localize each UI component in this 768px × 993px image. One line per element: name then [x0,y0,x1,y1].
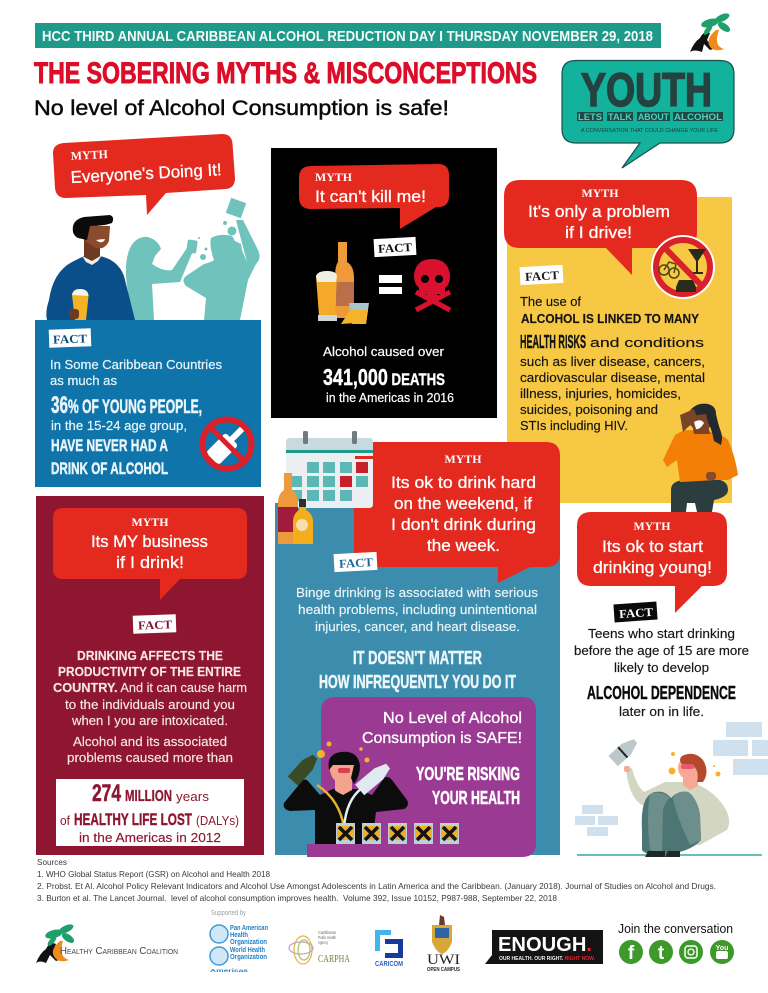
footer logo: healthy caribbean coalition [36,922,178,963]
illustration: man pouring two bottles [284,742,459,844]
myth bubble: only a problem if i drive: It's only a problem [528,202,670,221]
panel: fact, dark red, productivity [36,496,264,855]
fact label: FACT [53,331,87,347]
fact text: and conditions [590,335,705,350]
fact label [374,237,416,257]
fact label [133,614,176,634]
campaign bubble: youth: ABOUT [638,112,669,122]
myth bubble: everyone's doing it: Everyone's Doing It! [70,160,222,187]
fact text: injuries, cancer, and heart disease. [315,619,520,634]
logo: paho who [210,925,268,973]
fact text [53,648,247,765]
callout: no level is safe: No Level of Alcohol [383,710,522,727]
fact text: STIs including HIV. [520,418,628,433]
fact text [296,585,539,692]
myth bubble: its my business: MYTH [132,515,169,529]
sources: 2. Probst. Et Al. Alcohol Policy Relevant Indicators and Alcohol Use Amongst Adolescents in Latin America and the Caribbean. (January 2018). Journal of Studies on Alcohol and Drugs. [37,881,716,891]
header banner [35,23,661,48]
logo: uwi: UWI [427,952,460,968]
myth bubble: drink hard on the weekend: Its ok to drink hard [391,473,536,492]
logo: caricom: CARICOM [375,961,403,968]
figure: teal friend left [126,237,193,320]
fact text: DRINK OF ALCOHOL [51,459,168,478]
social: join the conversation: t [658,943,665,964]
callout: no level is safe: YOUR HEALTH [432,788,520,808]
fact text: when I you are intoxicated. [71,713,228,728]
logo: carpha [289,930,351,965]
sources [37,857,716,903]
fact text: PRODUCTIVITY OF THE ENTIRE [58,664,241,679]
figure: teal friend right [184,220,260,320]
myth bubble: ok to start drinking young [577,512,727,613]
myth bubble: only a problem if i drive: MYTH [582,186,619,200]
fact text: HOW INFREQUENTLY YOU DO IT [319,672,516,692]
stat box: 274 million years: MILLION [125,788,172,805]
campaign bubble: youth [562,60,734,168]
logo: carpha: Agency [318,940,328,945]
myth bubble: only a problem if i drive [504,180,697,275]
sources: 3. Burton et al. The Lancet Journal. level of alcohol consumption improves health. Volume 392, Issue 10152, P987-988, September 22, 2018 [37,893,557,903]
illustration: young people drinking [46,198,260,320]
fact text: Alcohol caused over [323,344,445,359]
fact text: teens: before the age of 15 are more [574,643,749,658]
fact text [323,344,454,405]
stat box: 274 million years [56,779,244,846]
fact label [520,265,563,285]
logo: paho who: Organization [230,939,267,946]
fact text: In Some Caribbean Countries [50,357,222,372]
logo: carpha: CARPHA [318,954,351,965]
stat box: 274 million years: (DALYs) [196,813,239,828]
myth bubble: its my business: if I drink! [116,553,184,572]
campaign bubble: youth: A CONVERSATION THAT COULD CHANGE YOUR LIFE [581,128,718,134]
fact label: FACT [339,555,373,571]
logo: carpha: Caribbean [318,930,336,935]
fact label [49,328,91,348]
stat box: 274 million years: 274 [92,780,121,807]
logo: carpha: Public Health [318,935,336,940]
icon: raised glasses and bubbles [186,198,246,260]
footer logo: healthy caribbean coalition: HEALTHY CARIBBEAN COALITION [60,946,178,957]
myth bubble: drink hard on the weekend [354,442,560,583]
logo: paho who: Health [230,932,248,939]
myth bubble: drink hard on the weekend: I don't drink during [391,515,536,534]
myth bubble: ok to start drinking young: Its ok to start [602,537,703,556]
myth bubble: its my business: Its MY business [91,532,208,551]
row of crossed shot glasses [336,823,459,844]
campaign bubble: youth: ALCOHOL [674,112,723,122]
fact text: 36% OF YOUNG PEOPLE, [51,392,202,419]
myth bubble: it can't kill me: It can't kill me! [315,187,426,206]
subtitle: No level of Alcohol Consumption is safe! [34,97,449,120]
fact text: HEALTH RISKS [520,332,586,352]
logo: uwi: OPEN CAMPUS [427,967,461,973]
fact label: black: FACT [619,605,654,621]
social: join the conversation: f [628,943,635,964]
myth bubble: it can't kill me [299,164,449,229]
fact text: teens: likely to develop [614,660,709,675]
logo: uwi [427,915,461,973]
fact text [520,294,705,433]
header banner: HCC THIRD ANNUAL CARIBBEAN ALCOHOL REDUCTION DAY I THURSDAY NOVEMBER 29, 2018 [42,28,653,45]
fact text: The use of [520,294,581,309]
fact text: as much as [50,373,117,388]
myth bubble: its my business [53,508,247,600]
callout: no level is safe: YOU'RE RISKING [416,764,520,784]
stat box: 274 million years: of [60,813,70,828]
logo: enough campaign [485,930,603,964]
myth bubble: ok to start drinking young: MYTH [634,519,671,533]
panel: fact, young people [35,320,261,487]
stat box: 274 million years: in the Americas in 2012 [79,830,221,845]
icon: skull and crossbones [414,259,450,310]
fact text: such as liver disease, cancers, [520,354,705,369]
logo: enough campaign: OUR HEALTH. OUR RIGHT. RIGHT NOW. [499,956,596,962]
fact text: HAVE NEVER HAD A [51,436,168,455]
fact label: black [613,601,658,622]
campaign bubble: youth: TALK [608,112,633,122]
logo: caricom [375,930,403,968]
sources: Sources [37,857,67,867]
figure: man in blue sweater [46,215,135,320]
fact text: ALCOHOL IS LINKED TO MANY [521,311,699,326]
stat box: 274 million years: years [176,789,210,804]
title: THE SOBERING MYTHS & MISCONCEPTIONS [34,57,537,90]
fact text: in the Americas in 2016 [326,390,454,405]
fact text: teens: later on in life. [619,704,704,719]
fact text: in the 15-24 age group, [51,418,187,433]
campaign bubble: youth: YOUTH [581,63,712,116]
myth bubble: only a problem if i drive: if I drive! [565,223,632,242]
myth bubble: everyone's doing it [53,134,235,215]
myth bubble: drink hard on the weekend: on the weekend, if [394,494,532,513]
logo: paho who: Organization [230,954,267,961]
social: join the conversation: Join the conversation [618,922,733,936]
fact text: teens: Teens who start drinking [588,626,735,641]
fact text: problems caused more than [67,750,233,765]
myth bubble: ok to start drinking young: drinking young! [593,558,712,577]
myth bubble: drink hard on the weekend: the week. [427,536,500,555]
callout: no level is safe: Consumption is SAFE! [362,730,522,747]
logo: paho who: World Health [230,947,265,954]
fact text [50,357,222,478]
panel: fact, binge drinking [275,431,560,857]
social: join the conversation [618,922,734,964]
logo: enough campaign: ENOUGH. [498,934,592,956]
fact text: IT DOESN'T MATTER [353,648,482,668]
callout: no level is safe [307,697,536,857]
icon: two bottles [278,473,313,544]
icon: calendar [286,431,373,508]
decorative brick walls [575,722,768,836]
icon: coalition palm logo [690,11,732,52]
fact label [334,552,377,572]
fact text: to the individuals around you [65,697,235,712]
fact label: FACT [378,240,412,256]
myth bubble: everyone's doing it: MYTH [70,147,109,163]
logo: paho who: Americas [210,968,249,973]
panel: fact, yellow, health risks [504,180,732,503]
fact text: COUNTRY. And it can cause harm [53,680,247,695]
stat box: 274 million years: HEALTHY LIFE LOST [74,810,192,829]
fact text: suicides, poisoning and [520,402,658,417]
fact label: FACT [525,268,559,284]
sources: 1. WHO Global Status Report (GSR) on Alcohol and Health 2018 [37,869,270,879]
icon: equals sign [379,275,402,294]
fact text: illness, injuries, homicides, [520,386,681,401]
fact text: Binge drinking is associated with serious [296,585,539,600]
fact text: cardiovascular disease, mental [520,370,705,385]
icon: no drink driving [651,235,715,299]
fact text: Alcohol and its associated [73,734,227,749]
illustration: seated teen with bottle [577,736,762,857]
supported by label: Supported by [211,910,246,917]
campaign bubble: youth: LETS [578,112,602,122]
icon: no bottle [202,420,252,468]
logo: paho who: Pan American [230,925,268,932]
myth bubble: drink hard on the weekend: MYTH [444,452,482,466]
fact text: DRINKING AFFECTS THE [77,648,223,663]
panel: fact, black, deaths [271,148,497,418]
icon: alcoholic drinks [316,242,369,324]
myth bubble: it can't kill me: MYTH [315,170,353,184]
fact text: health problems, including unintentional [298,602,537,617]
fact label: FACT [138,617,172,633]
illustration: woman vomiting [663,404,738,512]
social: join the conversation: You [716,945,728,952]
fact text: teens [574,626,749,719]
fact text: 341,000 DEATHS [323,364,445,390]
